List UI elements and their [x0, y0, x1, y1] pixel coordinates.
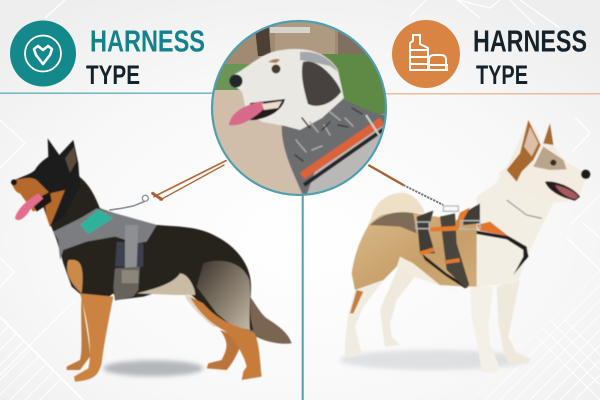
divider: vertical centre rule — [302, 195, 304, 400]
heading: left harness type: HARNESS — [90, 24, 205, 58]
heading: right harness type: TYPE — [476, 60, 528, 90]
divider: left header rule — [0, 92, 214, 94]
heading: right harness type — [473, 24, 587, 90]
heading: left harness type — [86, 24, 205, 90]
photo: left dog with grey and teal harness — [11, 138, 292, 382]
heading: left harness type: TYPE — [86, 60, 140, 90]
photo: right dog with dark and orange harness — [340, 120, 590, 373]
icon: teal heart badge — [10, 20, 76, 86]
icon: orange product badge — [392, 20, 460, 88]
divider: right header rule — [385, 93, 600, 94]
photo: circular close-up of grey dog with orange collar — [210, 20, 388, 196]
